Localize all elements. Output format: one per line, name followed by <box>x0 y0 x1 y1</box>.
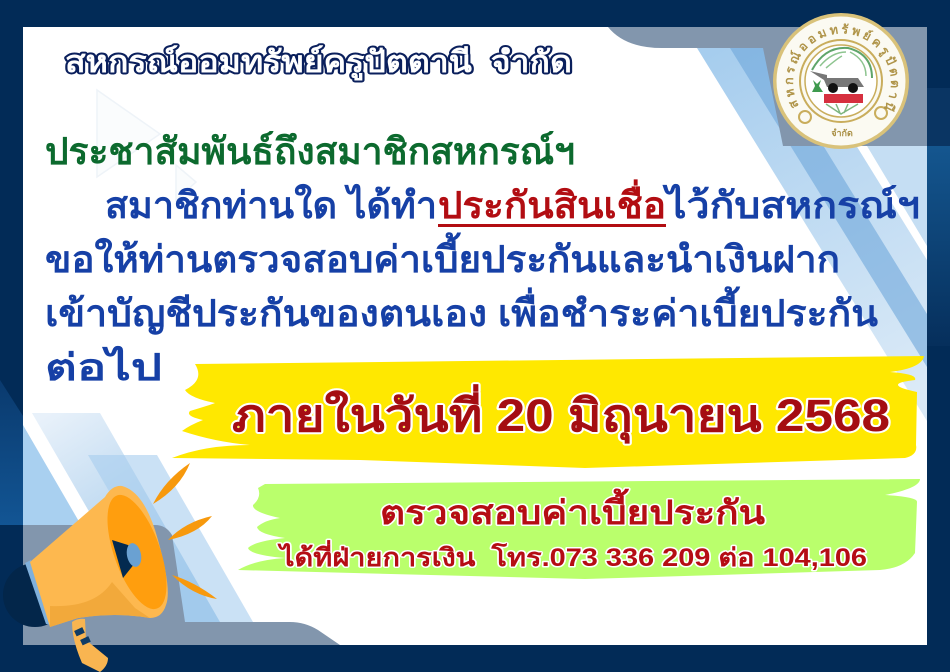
faint play triangles <box>97 90 196 200</box>
grey band: bottom left corner <box>23 525 340 645</box>
decorative stripes: bottom left <box>23 413 253 622</box>
icon: cooperative seal: สหกรณ์ออมทรัพย์ครูปัตตานี <box>786 23 898 112</box>
text block: announcement body: ประกันสินเชื่อ <box>438 179 666 226</box>
text block: announcement body: ไว้กับสหกรณ์ฯ <box>662 183 920 226</box>
text block: announcement body: ต่อไป <box>45 345 162 388</box>
decorative stripes: top right <box>697 48 927 421</box>
brush highlight: yellow <box>172 356 924 468</box>
sub-heading: green announcement: ประชาสัมพันธ์ถึงสมาชิกสหกรณ์ฯ <box>45 131 575 172</box>
icon: cooperative seal <box>773 13 909 149</box>
icon: megaphone <box>3 463 217 672</box>
callout: contact details: ได้ที่ฝ่ายการเงิน โทร.073 336 209 ต่อ 104,106 <box>277 540 867 572</box>
headline: organisation name: สหกรณ์ออมทรัพย์ครูปัตตานี จำกัด <box>65 45 572 81</box>
brush highlight: green <box>238 479 920 579</box>
icon: cooperative seal: จำกัด <box>831 128 853 138</box>
text block: announcement body: สมาชิกท่านใด ได้ทำ <box>105 183 437 226</box>
text block: announcement body: เข้าบัญชีประกันของตนเอง เพื่อชำระค่าเบี้ยประกัน <box>45 286 878 335</box>
callout: check premium: ตรวจสอบค่าเบี้ยประกัน <box>380 488 766 531</box>
text block: announcement body: ขอให้ท่านตรวจสอบค่าเบี้ยประกันและนำเงินฝาก <box>45 232 840 280</box>
deadline callout: ภายในวันที่ 20 มิถุนายน 2568 <box>232 384 890 444</box>
text block: announcement body <box>45 179 920 388</box>
grey band: top right corner <box>608 27 927 146</box>
